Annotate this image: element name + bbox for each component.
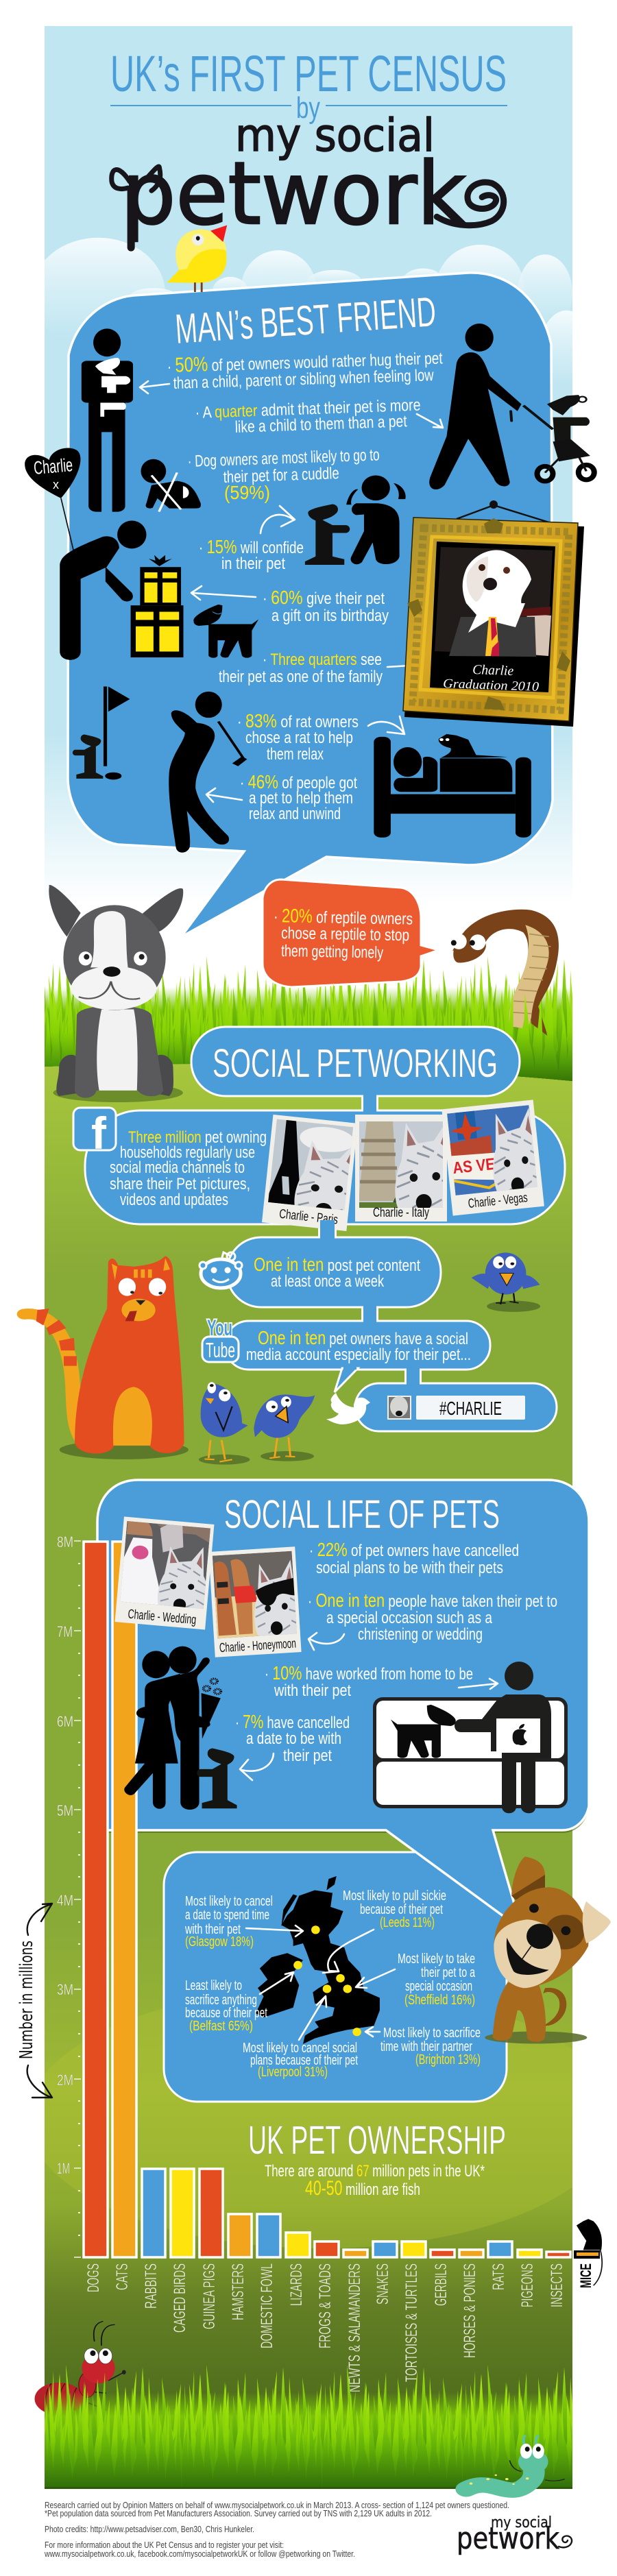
- hashtag box: #CHARLIE: [439, 1398, 502, 1419]
- icon: reddit: [199, 1252, 242, 1288]
- y axis: 2M: [57, 2071, 73, 2089]
- map label: Liverpool: [243, 2041, 358, 2080]
- balloon: Charlie heart: Charlie: [33, 454, 73, 478]
- title divider with by: by: [296, 91, 320, 125]
- map label: Sheffield: (Sheffield 16%): [404, 1993, 475, 2008]
- map label: Liverpool: (Liverpool 31%): [258, 2065, 328, 2080]
- polaroid: honeymoon: Charlie - Honeymoon: [219, 1636, 296, 1655]
- icon: woman walking dog in stroller: [429, 324, 597, 489]
- stat: 22% cancelled plans: · 22% of pet owners have cancelled: [309, 1539, 519, 1560]
- stat: 15% confide: [199, 536, 304, 573]
- stat: three million: videos and updates: [120, 1191, 228, 1209]
- orange bubble: [263, 879, 439, 987]
- grass over bubble and snake: [45, 982, 572, 1079]
- icon: twitter bird: [326, 1393, 370, 1424]
- map label: Belfast: sacrifice anything: [185, 1993, 257, 2008]
- bar labels: DOGS: [84, 2263, 103, 2292]
- icon: youtube: You: [207, 1315, 232, 1340]
- bar labels: GUINEA PIGS: [200, 2263, 219, 2329]
- stat: post content: at least once a week: [271, 1272, 385, 1291]
- chick on bubble: [167, 225, 227, 292]
- bar labels: LIZARDS: [287, 2263, 306, 2306]
- arrows: map: [246, 1925, 395, 2040]
- stat: three million: Three million pet owning: [128, 1128, 267, 1147]
- bar labels: TORTOISES & TURTLES: [402, 2263, 421, 2382]
- stat: 10% worked from home: with their pet: [274, 1681, 351, 1700]
- pill: social petworking: [191, 1027, 520, 1386]
- logo: my social petwork: [112, 109, 504, 247]
- map: UK and Ireland: [256, 1876, 380, 2044]
- pill: hashtag charlie: [326, 1367, 557, 1431]
- stat: 50% would rather hug: [167, 345, 443, 393]
- map label: Brighton: (Brighton 13%): [415, 2052, 481, 2067]
- map label: Leeds: Most likely to pull sickie: [343, 1888, 446, 1904]
- stat: 20% reptile owners: · 20% of reptile owners: [274, 905, 413, 929]
- logo: footer: petwork: [457, 2521, 559, 2556]
- stat: 10% worked from home: [265, 1662, 473, 1700]
- map label: Belfast: because of their pet: [185, 2006, 267, 2021]
- stat: 20% reptile owners: them getting lonely: [281, 942, 383, 962]
- icon: man bending over gifts: [60, 521, 183, 660]
- icon: mouse on bar: [577, 2219, 602, 2285]
- stat: three million: share their Pet pictures,: [110, 1175, 250, 1193]
- icon: man hugging dog: [82, 328, 133, 513]
- mascot: orange cat: [25, 1256, 189, 1459]
- stat: one in ten occasion: · One in ten people have taken their pet to: [308, 1590, 557, 1611]
- icon: facebook: f: [91, 1108, 107, 1158]
- bar chart: UK pet ownership: [57, 1533, 600, 2392]
- polaroid: Vegas: Charlie - Vegas: [468, 1191, 529, 1211]
- polaroid: Italy: Charlie - Italy: [373, 1206, 429, 1220]
- map label: Leeds: (Leeds 11%): [380, 1915, 435, 1930]
- map label: Brighton: Most likely to sacrifice: [383, 2026, 481, 2041]
- heading: man's best friend: MAN’s BEST FRIEND: [173, 288, 437, 352]
- stat: post content: One in ten post pet content: [254, 1254, 420, 1275]
- axis title: number in millions: Number in millions: [16, 1941, 37, 2059]
- icon: dog waiting: [193, 605, 258, 658]
- bar labels: INSECTS: [548, 2263, 566, 2307]
- polaroid: Paris: [262, 1115, 355, 1231]
- bar labels: PIGEONS: [518, 2263, 537, 2307]
- bar labels: HAMSTERS: [229, 2263, 247, 2320]
- text: 67 million pets: [265, 2162, 485, 2200]
- y axis: 4M: [57, 1892, 73, 1909]
- stat: 7% cancelled a date: their pet: [283, 1747, 332, 1765]
- icon: sad person with dog: [305, 475, 406, 565]
- balloon: Charlie heart: [25, 448, 80, 551]
- stat: 20% reptile owners: chose a reptile to stop: [281, 924, 409, 945]
- bar labels: RABBITS: [142, 2263, 160, 2309]
- bar labels: SNAKES: [374, 2263, 392, 2305]
- stat: 46% relax: · 46% of people got: [240, 771, 357, 792]
- stat: three quarters family: [219, 651, 383, 686]
- logo: my social petwork: my social: [235, 109, 435, 162]
- grass band lower: [45, 2365, 572, 2489]
- polaroid: wedding: Charlie - Wedding: [128, 1607, 197, 1627]
- y axis: 7M: [57, 1623, 73, 1640]
- map label: Liverpool: Most likely to cancel social: [243, 2041, 357, 2056]
- stat: 46% relax: [240, 771, 357, 823]
- polaroid: Italy: [355, 1115, 457, 1222]
- stat: 60% gift: · 60% give their pet: [263, 587, 385, 608]
- bar labels: HORSES & PONIES: [461, 2263, 479, 2358]
- map label: Glasgow: (Glasgow 18%): [185, 1934, 254, 1949]
- logo: my social petwork: petwork: [122, 143, 466, 244]
- stat: 22% cancelled plans: [309, 1539, 519, 1577]
- stat: 50% would rather hug: than a child, parent or sibling when feeling low: [173, 366, 435, 393]
- icon: person in bed with rat: [374, 734, 531, 838]
- stat: dog owners cuddle: · Dog owners are most likely to go to: [187, 446, 380, 471]
- icon: facebook: [73, 1108, 116, 1158]
- bar labels: CATS: [113, 2263, 132, 2290]
- footnotes: For more information about the UK Pet Census and to register your pet visit:: [45, 2540, 284, 2550]
- icon: baby crossed out: [141, 459, 201, 511]
- stat: 60% gift: a gift on its birthday: [271, 607, 389, 625]
- text: 67 million pets: 40-50 million are fish: [305, 2177, 420, 2200]
- icon: youtube: Tube: [206, 1338, 235, 1362]
- stat: three million: [110, 1128, 267, 1209]
- mascot: green caterpillar: [466, 2435, 565, 2490]
- bar labels: [84, 2263, 594, 2392]
- text: 67 million pets: There are around 67 million pets in the UK*: [265, 2162, 485, 2180]
- map label: Brighton: time with their partner: [380, 2039, 472, 2054]
- footnotes: *Pet population data sourced from Pet Manufacturers Association. Survey carried out by TNS with 2,129 UK adults in 2012.: [45, 2508, 432, 2518]
- map label: Glasgow: with their pet: [184, 1922, 241, 1937]
- panel: facebook stat: [73, 1094, 565, 1224]
- stat: a quarter: · A quarter admit that their pet is more: [195, 396, 421, 422]
- stat: 15% confide: in their pet: [221, 555, 285, 573]
- stat: a quarter: like a child to them than a pet: [234, 412, 407, 437]
- stat: 83% rat owners: [237, 710, 359, 764]
- bar labels: DOMESTIC FOWL: [258, 2263, 276, 2348]
- picture frame: Charlie graduation: [403, 500, 584, 727]
- bubble: man's best friend: [68, 273, 553, 937]
- stat: 83% rat owners: chose a rat to help: [245, 729, 353, 747]
- map label: Liverpool: plans because of their pet: [250, 2053, 358, 2068]
- stat: dog owners cuddle: [187, 446, 380, 503]
- stat: one in ten account: One in ten pet owners have a social: [258, 1327, 468, 1348]
- polaroid: honeymoon: [208, 1546, 303, 1657]
- pill: one in ten post: [199, 1220, 441, 1307]
- footnotes: www.mysocialpetwork.co.uk, facebook.com/mysocialpetworkUK or follow @petworking on Twitter.: [44, 2549, 355, 2559]
- stat: 83% rat owners: · 83% of rat owners: [237, 710, 359, 731]
- map label: Leeds: [343, 1888, 446, 1930]
- polaroid: Vegas: [441, 1099, 546, 1216]
- axis title: number in millions: [16, 1904, 52, 2098]
- stat: 7% cancelled a date: a date to be with: [246, 1729, 341, 1748]
- pill: youtube stat: [202, 1304, 490, 1392]
- icon: person on sofa with dog and laptop: [373, 1662, 568, 1813]
- stat: one in ten occasion: christening or wedding: [358, 1625, 483, 1644]
- map label: Brighton: [380, 2026, 481, 2067]
- stat: three million: households regularly use: [120, 1143, 255, 1162]
- logo: footer: my social: [491, 2514, 552, 2531]
- bar labels: MICE: [577, 2263, 594, 2288]
- y axis: 1M: [57, 2160, 70, 2177]
- polaroid: Paris: Charlie - Paris: [278, 1207, 339, 1228]
- clouds: [45, 237, 572, 373]
- map label: Sheffield: Most likely to take: [398, 1952, 475, 1967]
- picture frame: Charlie graduation: Graduation 2010: [443, 677, 540, 694]
- stat: 7% cancelled a date: · 7% have cancelled: [235, 1711, 350, 1732]
- map label: Sheffield: their pet to a: [421, 1965, 476, 1980]
- stat: 46% relax: a pet to help them: [249, 789, 353, 807]
- stat: three quarters family: · Three quarters see: [263, 651, 382, 669]
- stat: one in ten account: media account especially for their pet...: [246, 1346, 471, 1364]
- map label: Glasgow: a date to spend time: [185, 1908, 269, 1923]
- map label: Glasgow: Most likely to cancel: [185, 1894, 273, 1909]
- polaroid: Vegas: AS VE: [452, 1155, 496, 1178]
- balloon: Charlie heart: x: [53, 478, 59, 491]
- stat: one in ten account: [246, 1327, 471, 1364]
- bar labels: FROGS & TOADS: [316, 2263, 335, 2348]
- y axis: 3M: [57, 1981, 73, 1998]
- hashtag box: [416, 1396, 525, 1420]
- stat: a quarter: [195, 396, 421, 437]
- snake: [451, 910, 559, 1036]
- map label: Glasgow: [184, 1894, 273, 1949]
- stat: one in ten occasion: a special occasion such as a: [326, 1609, 493, 1627]
- stat: 60% gift: [263, 587, 389, 625]
- stat: 20% reptile owners: [274, 905, 413, 962]
- mascot: blue bird right: [472, 1252, 540, 1312]
- mascot: two blue birds: [199, 1382, 315, 1465]
- stat: dog owners cuddle: their pet for a cuddle: [223, 464, 339, 487]
- sky and ground backdrop: [45, 26, 572, 2416]
- arrows: bubble one: [140, 381, 443, 802]
- y axis: 6M: [57, 1713, 73, 1730]
- map label: Belfast: Least likely to: [185, 1978, 242, 1993]
- icon: youtube: [202, 1315, 239, 1362]
- bubble: social life of pets: [97, 1480, 589, 1930]
- stat: 83% rat owners: them relax: [267, 745, 324, 764]
- map label: Belfast: [185, 1978, 267, 2034]
- stat: 22% cancelled plans: social plans to be with their pets: [316, 1559, 503, 1577]
- polaroid: wedding: [115, 1517, 214, 1629]
- icon: golfer with flag and dog: [73, 686, 247, 853]
- map label: Belfast: (Belfast 65%): [189, 2019, 253, 2034]
- footnotes: Research carried out by Opinion Matters on behalf of www.mysocialpetwork.co.uk in March 2013. A cross- section of 1,124 pet owners questioned.: [45, 2500, 509, 2510]
- map label: Leeds: because of their pet: [360, 1902, 443, 1917]
- footnotes: Photo credits: http://www.petsadviser.com, Ben30, Chris Hunkeler.: [45, 2524, 254, 2534]
- y axis: 5M: [57, 1802, 73, 1819]
- bar labels: RATS: [489, 2263, 508, 2290]
- mascot: red ant: [35, 2321, 126, 2422]
- arrows: social life: [240, 1633, 498, 1780]
- bar labels: NEWTS & SALAMANDERS: [346, 2263, 364, 2392]
- stat: post content: [254, 1254, 420, 1291]
- stat: 15% confide: · 15% will confide: [199, 536, 304, 557]
- y axis: [57, 1533, 81, 2257]
- mascot: brown dog: [485, 1856, 611, 2043]
- stat: dog owners cuddle: (59%): [224, 482, 270, 503]
- stat: one in ten occasion: [308, 1590, 557, 1644]
- stat: three million: social media channels to: [110, 1158, 245, 1177]
- bar labels: CAGED BIRDS: [171, 2263, 189, 2333]
- grass band upper: [45, 956, 572, 1081]
- map label: Sheffield: special occasion: [405, 1979, 472, 1994]
- stat: 50% would rather hug: · 50% of pet owners would rather hug their pet: [167, 345, 443, 377]
- bubble shadow and map panel: [164, 1852, 507, 2102]
- bar labels: GERBILS: [432, 2263, 450, 2306]
- y axis: 8M: [57, 1533, 73, 1551]
- footnotes: [44, 2500, 509, 2559]
- stat: 10% worked from home: · 10% have worked from home to be: [265, 1662, 473, 1684]
- icon: couple with flowers and dog: [124, 1647, 237, 1810]
- mascot: boston terrier: [49, 885, 183, 1102]
- stat: 46% relax: relax and unwind: [249, 805, 341, 823]
- picture frame: Charlie graduation: Charlie: [472, 662, 514, 679]
- map label: Sheffield: [398, 1952, 476, 2008]
- stat: 7% cancelled a date: [235, 1711, 350, 1765]
- bars: [84, 1542, 570, 2257]
- stat: three quarters family: their pet as one of the family: [219, 668, 383, 686]
- avatar: [387, 1396, 411, 1420]
